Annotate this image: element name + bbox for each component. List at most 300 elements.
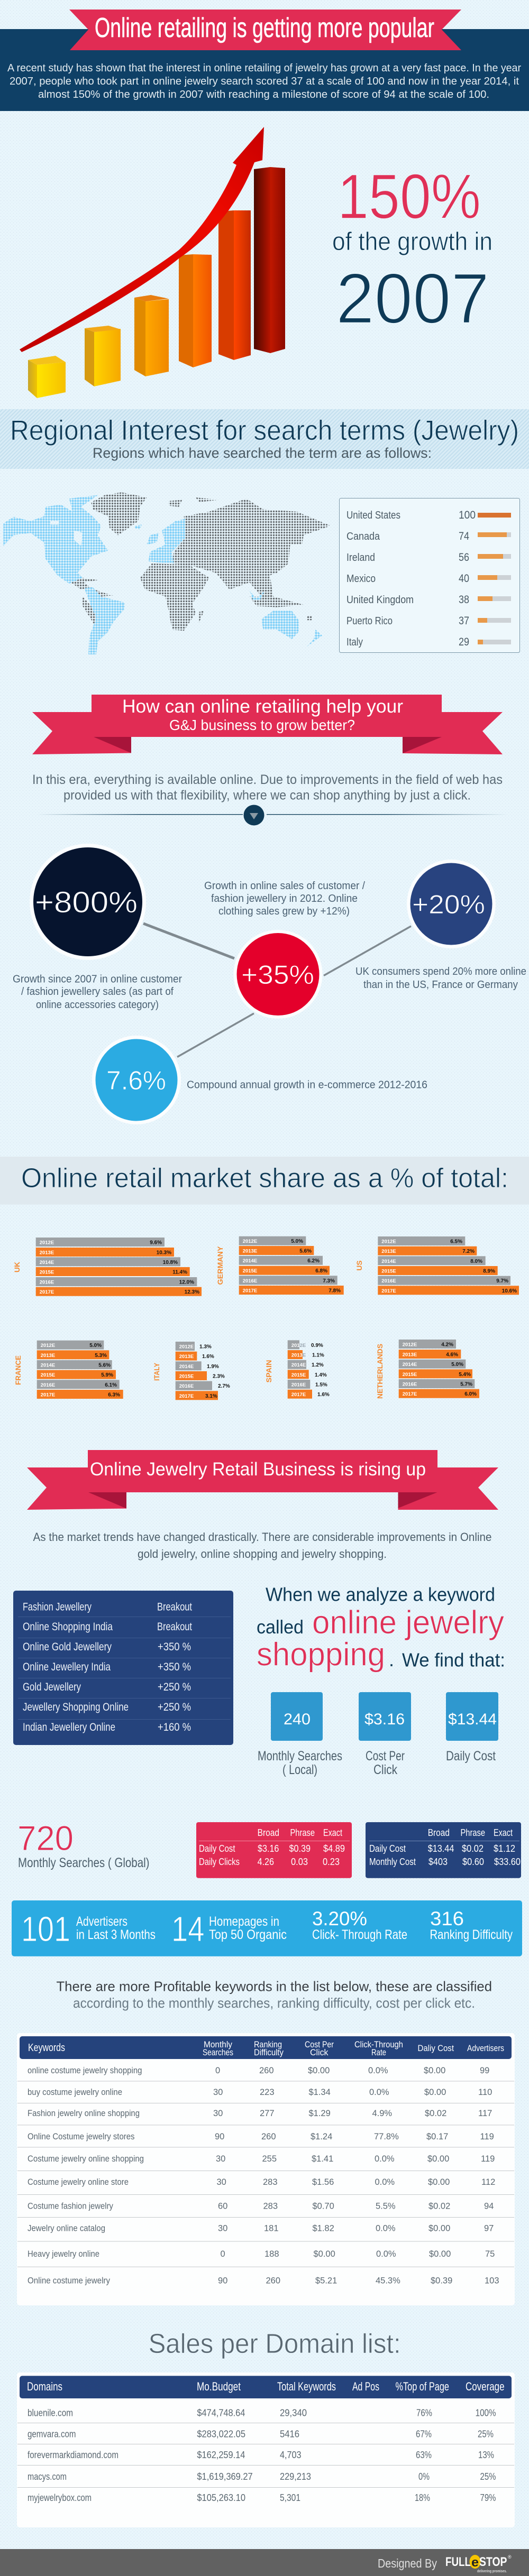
row: buy costume jewelry online: 0.0%: [369, 2088, 389, 2097]
panel: daily cost and clicks table: Daily Cost: [199, 1843, 235, 1854]
row: Online Gold Jewellery: [23, 1641, 191, 1653]
stat card: daily cost: $13.44: [448, 1711, 497, 1728]
row: forevermarkdiamond.com: [28, 2449, 494, 2460]
row: macys.com: 0%: [418, 2471, 430, 2482]
bar chart: US: 8.9%: [483, 1269, 495, 1274]
row: Costume fashion jewelry: $0.02: [428, 2202, 450, 2211]
row: Canada: [346, 530, 511, 542]
subheading: Regions which have searched the term are as follows:: [93, 445, 432, 461]
row: Jewelry online catalog: [28, 2224, 494, 2233]
row: Fashion Jewellery: Breakout: [157, 1601, 192, 1613]
row: Fashion Jewellery: Fashion Jewellery: [23, 1601, 92, 1613]
table header: [20, 2036, 512, 2059]
row: Costume jewelry online shopping: 255: [262, 2154, 277, 2164]
circle: 7.6%: 7.6%: [106, 1066, 166, 1095]
bar chart: Spain: 2013E: [291, 1352, 306, 1359]
stat: advertisers: 101: [21, 1909, 70, 1949]
row: Costume jewelry online store: 283: [263, 2177, 278, 2187]
caption: UK consumers: [355, 966, 526, 991]
bar chart: Spain: 1.5%: [315, 1382, 327, 1388]
row: bluenile.com: bluenile.com: [28, 2407, 73, 2418]
caption: growth since 2007: Growth since 2007 in online customer: [13, 974, 182, 985]
stat: click-through rate: Click- Through Rate: [312, 1927, 407, 1942]
ribbon: online jewelry retail business: [27, 1450, 498, 1510]
row: Gold Jewellery: Gold Jewellery: [23, 1681, 81, 1693]
row: Indian Jewellery Online: Indian Jewellery Online: [23, 1721, 115, 1733]
stat card: cost per click: Cost Per: [366, 1749, 405, 1764]
panel: daily and monthly cost table: $0.02: [462, 1843, 484, 1854]
row: Ireland: [346, 551, 511, 564]
row: Mexico: Mexico: [346, 573, 376, 585]
paragraph: profitable keywords: according to the monthly searches, ranking difficulty, cost per click etc.: [73, 1995, 475, 2011]
heading: keyword analysis: online jewelry: [312, 1604, 504, 1641]
row: forevermarkdiamond.com: 63%: [416, 2449, 432, 2460]
row: Heavy jewelry online: Heavy jewelry online: [28, 2249, 99, 2259]
bar chart: France: 2017E: [41, 1392, 55, 1398]
row: Online Costume jewelry stores: Online Costume jewelry stores: [28, 2132, 134, 2141]
stat: click-through rate: [312, 1908, 407, 1942]
bar chart: Italy: 2016E: [179, 1383, 194, 1389]
bar chart: US: 2012E: [381, 1239, 396, 1244]
row: Costume jewelry online shopping: $0.00: [427, 2154, 449, 2164]
bar chart: Italy: 2015E: [179, 1373, 194, 1380]
table header: Searches: [203, 2047, 233, 2057]
row: Costume jewelry online store: 30: [217, 2177, 226, 2187]
bar chart: Spain: 2015E: [291, 1372, 306, 1378]
heading: keyword analysis: called: [257, 1616, 304, 1638]
row: Costume jewelry online store: 0.0%: [375, 2177, 395, 2187]
icon: rising arrow: [20, 127, 264, 352]
row: Online Costume jewelry stores: [28, 2132, 494, 2141]
row: Italy: [346, 636, 511, 648]
table header: Rate: [371, 2047, 386, 2057]
bar chart: Germany: 2012E: [243, 1239, 257, 1244]
table header: Difficulty: [254, 2047, 284, 2057]
row: Jewelry online catalog: $1.82: [312, 2224, 334, 2233]
row: Heavy jewelry online: $0.00: [313, 2249, 335, 2259]
paragraph: market trends: [33, 1530, 492, 1561]
bar chart: France: 5.9%: [101, 1372, 113, 1378]
bar chart: Spain: 1.4%: [315, 1372, 327, 1378]
panel: daily cost and clicks table: Phrase: [290, 1827, 315, 1838]
bar chart: Netherlands: [376, 1340, 479, 1399]
panel: daily cost and clicks table: $4.89: [323, 1843, 345, 1854]
bar chart: US: 2014E: [381, 1259, 396, 1264]
row: Fashion jewelry online shopping: 277: [260, 2109, 275, 2118]
row: Costume fashion jewelry: 94: [484, 2202, 494, 2211]
row: Online Shopping India: Online Shopping India: [23, 1621, 113, 1633]
row: macys.com: 25%: [480, 2471, 496, 2482]
row: online costume jewelry shopping: [28, 2066, 489, 2075]
row: Jewelry online catalog: 181: [264, 2224, 279, 2233]
stat caption: of the growth in: [332, 228, 492, 256]
section divider with arrow badge: [37, 805, 508, 826]
row: Puerto Rico: Puerto Rico: [346, 615, 393, 627]
bar 3: [134, 295, 169, 376]
bar chart: Spain: SPAIN: [264, 1360, 273, 1383]
row: myjewelrybox.com: 18%: [415, 2492, 430, 2503]
row: Fashion jewelry online shopping: [28, 2109, 492, 2118]
circle: 7.6%: [92, 1036, 181, 1124]
stat card: daily cost: [446, 1692, 498, 1764]
icon: Fullestop logo: FULL: [445, 2555, 471, 2569]
row: Costume fashion jewelry: 5.5%: [376, 2202, 396, 2211]
bar chart: Germany: 2014E: [243, 1258, 257, 1264]
row: Gold Jewellery: +250 %: [158, 1681, 191, 1693]
footer: [0, 2549, 529, 2576]
panel: daily cost and clicks table: Exact: [323, 1827, 342, 1838]
row: Italy: 29: [459, 636, 469, 648]
row: myjewelrybox.com: [28, 2492, 496, 2503]
stat card: cost per click: Click: [373, 1762, 397, 1777]
bar chart: Germany: 2016E: [243, 1278, 257, 1284]
bar chart: US: [355, 1236, 519, 1295]
stat: advertisers: in Last 3 Months: [76, 1927, 156, 1942]
bar chart: Netherlands: 5.7%: [460, 1382, 472, 1387]
panel: daily and monthly cost table: Monthly Cost: [369, 1857, 416, 1867]
stat card: cost per click: $3.16: [364, 1711, 405, 1728]
bar chart: Italy: 2017E: [179, 1393, 194, 1399]
caption: online sales growth 2012: Growth in online sales of customer /: [204, 880, 365, 892]
stat: 720 monthly searches global: 720: [17, 1818, 74, 1858]
panel: daily cost and clicks table: 0.03: [291, 1857, 308, 1867]
row: gemvara.com: 25%: [478, 2428, 494, 2439]
table header: Coverage: [466, 2380, 505, 2393]
stat card: daily cost: Daily Cost: [446, 1749, 496, 1764]
row: bluenile.com: $474,748.64: [197, 2407, 245, 2418]
bar chart: France: 2015E: [41, 1372, 55, 1378]
circle: +20%: +20%: [412, 890, 485, 919]
row: online costume jewelry shopping: 260: [259, 2066, 274, 2075]
growth callout: [332, 161, 492, 338]
row: Fashion jewelry online shopping: 4.9%: [372, 2109, 392, 2118]
table header: Daliy Cost: [418, 2043, 454, 2053]
row: Gold Jewellery: [23, 1681, 191, 1693]
ribbon: how can online retailing help: [32, 695, 503, 754]
row: Indian Jewellery Online: [23, 1721, 191, 1733]
panel: daily cost and clicks table: [196, 1822, 352, 1878]
table header: Cost Per: [305, 2039, 334, 2049]
row: online costume jewelry shopping: 0.0%: [368, 2066, 388, 2075]
panel: daily and monthly cost table: $1.12: [494, 1843, 515, 1854]
bar chart: US: 6.5%: [450, 1239, 462, 1244]
caption: compound annual growth: Compound annual growth in e-commerce 2012-2016: [187, 1079, 427, 1091]
bar chart: Italy: 1.9%: [207, 1364, 219, 1370]
row: online costume jewelry shopping: online costume jewelry shopping: [28, 2066, 142, 2075]
row: Fashion jewelry online shopping: Fashion jewelry online shopping: [28, 2109, 140, 2118]
table header: [20, 2376, 512, 2398]
caption: growth since 2007: [13, 974, 182, 1011]
row: Online costume jewelry: [28, 2276, 499, 2286]
row: Costume jewelry online store: $0.00: [428, 2177, 450, 2187]
panel: daily cost and clicks table: 4.26: [258, 1857, 274, 1867]
row: Online Jewellery India: Online Jewellery India: [23, 1661, 111, 1673]
stat: advertisers: [21, 1909, 156, 1949]
bar chart: Spain: 2014E: [291, 1362, 306, 1368]
row: United Kingdom: [346, 594, 511, 606]
caption: online sales growth 2012: clothing sales grew by +12%): [218, 906, 350, 917]
bar 1: [28, 356, 66, 398]
bar chart: Netherlands: 2015E: [403, 1372, 417, 1378]
row: myjewelrybox.com: 5,301: [280, 2492, 300, 2503]
3D growth bar chart with arrow: [20, 127, 285, 398]
row: Online Jewellery India: +350 %: [158, 1661, 191, 1673]
panel: daily cost and clicks table: 0.23: [323, 1857, 340, 1867]
stat: homepages: [171, 1909, 287, 1949]
bar chart: UK: 2013E: [40, 1250, 54, 1256]
heading: keyword analysis: When we analyze a keyword: [266, 1584, 495, 1605]
bar chart: Spain: 2016E: [291, 1382, 306, 1388]
blue regions: [3, 495, 322, 654]
row: macys.com: $1,619,369.27: [197, 2471, 253, 2482]
stat: homepages: 14: [171, 1909, 204, 1949]
icon: Fullestop logo: delivering promises.: [477, 2569, 507, 2573]
row: Fashion Jewellery: [23, 1601, 192, 1613]
panel: regional interest list: [340, 498, 519, 652]
row: Online Costume jewelry stores: $0.17: [426, 2132, 448, 2141]
row: Online Gold Jewellery: +350 %: [158, 1641, 191, 1653]
bar chart: Germany: 7.8%: [329, 1288, 341, 1294]
bar chart: Germany: 5.0%: [291, 1239, 303, 1244]
bar chart: Netherlands: 6.0%: [464, 1391, 477, 1397]
row: Jewelry online catalog: 30: [218, 2224, 227, 2233]
row: Online Shopping India: Breakout: [157, 1621, 192, 1633]
bar chart: UK: 2016E: [40, 1279, 54, 1286]
bar chart: France: 2012E: [41, 1343, 55, 1349]
paragraph: online availability: [32, 772, 503, 802]
circle: +35%: +35%: [241, 960, 314, 990]
row: Fashion jewelry online shopping: 30: [213, 2109, 223, 2118]
row: Online Costume jewelry stores: $1.24: [311, 2132, 332, 2141]
heading: keyword analysis: shopping: [257, 1637, 385, 1673]
grey regions: [71, 492, 331, 653]
row: Online Costume jewelry stores: 77.8%: [374, 2132, 399, 2141]
bar chart: US: 8.0%: [470, 1259, 482, 1264]
bar chart: France: 6.3%: [108, 1392, 120, 1398]
heading: keyword analysis: [257, 1584, 505, 1673]
row: Online costume jewelry: 45.3%: [376, 2276, 400, 2286]
table header: Mo.Budget: [197, 2380, 241, 2393]
stat: click-through rate: 3.20%: [312, 1908, 367, 1929]
stat year: 2007: [336, 258, 489, 338]
bar chart: UK: 9.6%: [150, 1240, 162, 1245]
bar chart: France: [14, 1341, 123, 1399]
stat card: monthly searches local: [258, 1692, 342, 1777]
bar chart: Spain: 2017E: [291, 1392, 306, 1398]
row: macys.com: [28, 2471, 496, 2482]
bar chart: US: 7.2%: [462, 1249, 475, 1254]
bar chart: US: 2017E: [381, 1288, 396, 1294]
bar chart: Germany: 6.8%: [315, 1268, 327, 1274]
row: bluenile.com: [28, 2407, 496, 2418]
row: myjewelrybox.com: $105,263.10: [197, 2492, 245, 2503]
panel: breakout keywords table: [13, 1591, 233, 1745]
intro paragraph: 2007, people who took part in online jewelry search scored 37 at a scale of 100 and now in the year 2014, it: [10, 76, 519, 87]
table header: Advertisers: [467, 2043, 504, 2053]
row: gemvara.com: $283,022.05: [197, 2428, 245, 2439]
row: Online costume jewelry: $0.39: [431, 2276, 452, 2286]
row: Costume jewelry online store: Costume jewelry online store: [28, 2177, 129, 2187]
bar chart: Spain: 1.1%: [312, 1352, 324, 1359]
bar chart: UK: 11.4%: [172, 1270, 187, 1275]
row: Ireland: 56: [459, 551, 469, 564]
bar chart: France: 5.3%: [95, 1353, 107, 1359]
row: Heavy jewelry online: [28, 2249, 495, 2259]
row: Fashion jewelry online shopping: $1.29: [309, 2109, 331, 2118]
bar chart: Germany: 6.2%: [307, 1258, 320, 1264]
row: Jewelry online catalog: Jewelry online catalog: [28, 2224, 105, 2233]
row: online costume jewelry shopping: 99: [480, 2066, 489, 2075]
bar chart: Italy: 2012E: [179, 1344, 194, 1350]
row: Mexico: [346, 573, 511, 585]
panel: daily cost and clicks table: $0.39: [289, 1843, 311, 1854]
bar chart: Netherlands: NETHERLANDS: [376, 1344, 384, 1399]
row: Fashion jewelry online shopping: $0.02: [425, 2109, 446, 2118]
row: Canada: Canada: [346, 531, 380, 542]
row: bluenile.com: 100%: [476, 2407, 496, 2418]
row: myjewelrybox.com: 79%: [480, 2492, 496, 2503]
bar chart: Netherlands: 2013E: [403, 1352, 417, 1358]
stat: 720 monthly searches global: [17, 1818, 149, 1870]
row: buy costume jewelry online: 223: [260, 2088, 275, 2097]
row: online costume jewelry shopping: $0.00: [424, 2066, 445, 2075]
bar chart: UK: 2015E: [40, 1270, 54, 1275]
bar chart: Netherlands: 4.2%: [441, 1342, 453, 1348]
stat: ranking difficulty: Ranking Difficulty: [430, 1927, 513, 1942]
bar chart: Spain: 2012E: [291, 1343, 306, 1349]
caption: online sales growth 2012: [204, 880, 365, 917]
row: myjewelrybox.com: myjewelrybox.com: [28, 2492, 92, 2503]
bar chart: Netherlands: 2012E: [403, 1342, 417, 1348]
stat: advertisers: Advertisers: [76, 1914, 127, 1929]
title ribbon: [69, 10, 461, 50]
row: Jewellery Shopping Online: +250 %: [158, 1701, 191, 1713]
bar chart: UK: 12.0%: [179, 1279, 194, 1286]
bar chart: US: 2016E: [381, 1278, 396, 1284]
bar chart: Germany: 2017E: [243, 1288, 257, 1294]
bar chart: UK: 2014E: [40, 1260, 54, 1266]
heading: sales per domain: Sales per Domain list:: [149, 2329, 401, 2359]
row: Costume jewelry online shopping: 0.0%: [375, 2154, 395, 2164]
paragraph: online availability: In this era, everything is available online. Due to improvements in the field of web has: [32, 772, 503, 787]
bar chart: Spain: 1.6%: [317, 1392, 330, 1398]
row: Heavy jewelry online: 0: [220, 2249, 225, 2259]
paragraph: profitable keywords: There are more Profitable keywords in the list below, these are classified: [56, 1978, 492, 1994]
circle: +35%: [234, 930, 323, 1019]
connected growth stats: [13, 844, 526, 1124]
circle: +800%: [30, 844, 146, 960]
bar chart: Spain: 0.9%: [311, 1343, 323, 1349]
bar chart: Italy: 1.3%: [199, 1344, 212, 1350]
row: macys.com: macys.com: [28, 2471, 67, 2482]
world dot map: [3, 492, 331, 654]
row: Jewellery Shopping Online: Jewellery Shopping Online: [23, 1701, 129, 1713]
row: Costume jewelry online shopping: Costume jewelry online shopping: [28, 2154, 144, 2164]
bar 2: [85, 326, 121, 386]
bar chart: US: 2013E: [381, 1249, 396, 1254]
icon: Fullestop logo: e: [471, 2555, 479, 2570]
row: gemvara.com: 67%: [416, 2428, 432, 2439]
icon: Fullestop logo: STOP: [479, 2555, 507, 2569]
row: Online Gold Jewellery: Online Gold Jewellery: [23, 1641, 112, 1653]
panel: daily and monthly cost table: Broad: [428, 1827, 450, 1838]
row: Mexico: 40: [459, 573, 469, 585]
panel: daily and monthly cost table: $0.60: [462, 1857, 484, 1867]
circle: +20%: [407, 860, 496, 948]
table header: Monthly: [204, 2039, 232, 2049]
panel: daily and monthly cost table: $13.44: [428, 1843, 454, 1854]
row: United States: United States: [346, 510, 400, 521]
row: macys.com: 229,213: [280, 2471, 311, 2482]
row: Costume jewelry online store: $1.56: [312, 2177, 334, 2187]
panel: daily and monthly cost table: $33.60: [494, 1857, 521, 1867]
bar chart: Italy: 2013E: [179, 1354, 194, 1360]
row: forevermarkdiamond.com: 4,703: [280, 2449, 302, 2460]
row: Costume fashion jewelry: Costume fashion jewelry: [28, 2202, 114, 2211]
circle: +800%: +800%: [35, 885, 138, 919]
intro paragraph: almost 150% of the growth in 2007 with reaching a milestone of score of 94 at the scale of 100.: [38, 89, 489, 100]
panel: market share heading band: [0, 1157, 529, 1205]
caption: UK consumers: than in the US, France or Germany: [363, 979, 518, 991]
panel: daily and monthly cost table: Exact: [494, 1827, 513, 1838]
row: buy costume jewelry online: $1.34: [309, 2088, 331, 2097]
panel: daily and monthly cost table: Phrase: [460, 1827, 485, 1838]
row: Canada: 74: [459, 530, 469, 542]
bar chart: Germany: [216, 1236, 344, 1295]
panel: domains table: [17, 2372, 515, 2527]
row: Costume jewelry online shopping: 119: [481, 2154, 495, 2164]
row: Heavy jewelry online: 0.0%: [376, 2249, 396, 2259]
row: Online Shopping India: [23, 1621, 192, 1633]
table header: Click: [310, 2047, 329, 2057]
row: Costume jewelry online shopping: $1.41: [312, 2154, 333, 2164]
row: Indian Jewellery Online: +160 %: [158, 1721, 191, 1733]
bar chart: Italy: 3.1%: [205, 1393, 217, 1399]
stat: ranking difficulty: [430, 1908, 513, 1942]
ribbon heading: How can online retailing help your: [122, 696, 403, 717]
bar chart: France: 5.0%: [89, 1343, 102, 1349]
bar chart: Italy: 2014E: [179, 1364, 194, 1370]
panel: daily cost and clicks table: $3.16: [258, 1843, 279, 1854]
bar chart: Germany: GERMANY: [216, 1246, 224, 1285]
panel: daily and monthly cost table: [366, 1822, 521, 1878]
row: United States: [346, 509, 511, 521]
intro paragraph: [7, 62, 521, 100]
bar chart: Italy: ITALY: [152, 1362, 161, 1381]
bar chart: UK: 10.3%: [157, 1250, 171, 1256]
row: Italy: Italy: [346, 636, 363, 648]
caption: growth since 2007: / fashion jewellery sales (as part of: [21, 986, 174, 998]
stat: homepages: Top 50 Organic: [209, 1927, 287, 1942]
bar chart: Netherlands: 2016E: [403, 1382, 417, 1387]
stat card: cost per click: [359, 1692, 411, 1777]
row: forevermarkdiamond.com: forevermarkdiamond.com: [28, 2449, 118, 2460]
table header: Total Keywords: [277, 2380, 336, 2393]
bar chart: US: US: [355, 1260, 363, 1271]
bar chart: UK: 12.3%: [185, 1289, 199, 1295]
panel: daily and monthly cost table: $403: [428, 1857, 448, 1867]
row: Online Costume jewelry stores: 119: [480, 2132, 494, 2141]
row: United Kingdom: United Kingdom: [346, 594, 414, 606]
row: Online costume jewelry: Online costume jewelry: [28, 2276, 111, 2286]
table header: Click-Through: [354, 2039, 403, 2049]
bar chart: Germany: 2013E: [243, 1249, 257, 1254]
row: Ireland: Ireland: [346, 552, 375, 564]
stat: 720 monthly searches global: Monthly Searches ( Global): [18, 1855, 149, 1870]
stat: homepages: Homepages in: [209, 1914, 279, 1929]
row: gemvara.com: gemvara.com: [28, 2428, 76, 2439]
bar chart: Netherlands: 4.6%: [446, 1352, 458, 1358]
